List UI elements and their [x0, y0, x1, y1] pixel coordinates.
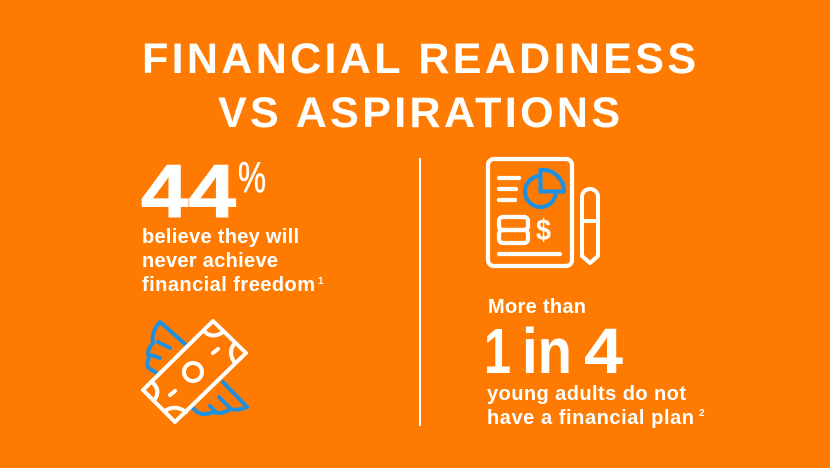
icon: banknote: [143, 321, 246, 422]
panel: right statistic: [484, 296, 705, 429]
icon: lower wing: [193, 382, 247, 414]
big number 44 percent: 44: [141, 149, 236, 233]
icon: flying money: [143, 321, 247, 422]
big number 1 in 4: in: [522, 315, 572, 387]
text: believe they will never achieve financial freedom: financial freedom: [142, 274, 315, 296]
panel: left statistic: [141, 149, 324, 296]
text: young adults do not have a financial plan: young adults do not: [487, 383, 686, 405]
text: believe they will never achieve financial freedom: never achieve: [142, 250, 278, 272]
title: FINANCIAL READINESS: [142, 35, 696, 83]
text: believe they will never achieve financial freedom: believe they will: [142, 226, 299, 248]
title: [142, 35, 696, 137]
title: VS ASPIRATIONS: [218, 89, 620, 137]
icon: pen: [582, 189, 598, 263]
icon: dollar sign: $: [536, 214, 551, 247]
big number 44 percent: %: [238, 153, 266, 202]
big number 1 in 4: [484, 315, 623, 387]
text: believe they will never achieve financial freedom: 1: [318, 276, 324, 287]
text: more than: More than: [488, 296, 586, 318]
big number 1 in 4: 1: [484, 315, 511, 387]
icon: upper wing: [147, 322, 186, 373]
icon: document: [488, 159, 572, 266]
icon: financial plan document: [488, 159, 598, 266]
icon: pie chart: [525, 170, 564, 207]
big number 44 percent: [141, 149, 266, 233]
text: young adults do not have a financial plan: [487, 383, 705, 429]
text: young adults do not have a financial plan: have a financial plan: [487, 407, 694, 429]
big number 1 in 4: 4: [584, 315, 623, 387]
text: young adults do not have a financial plan: 2: [699, 408, 705, 419]
divider: [419, 158, 421, 426]
text: believe they will never achieve financial freedom: [142, 226, 324, 296]
